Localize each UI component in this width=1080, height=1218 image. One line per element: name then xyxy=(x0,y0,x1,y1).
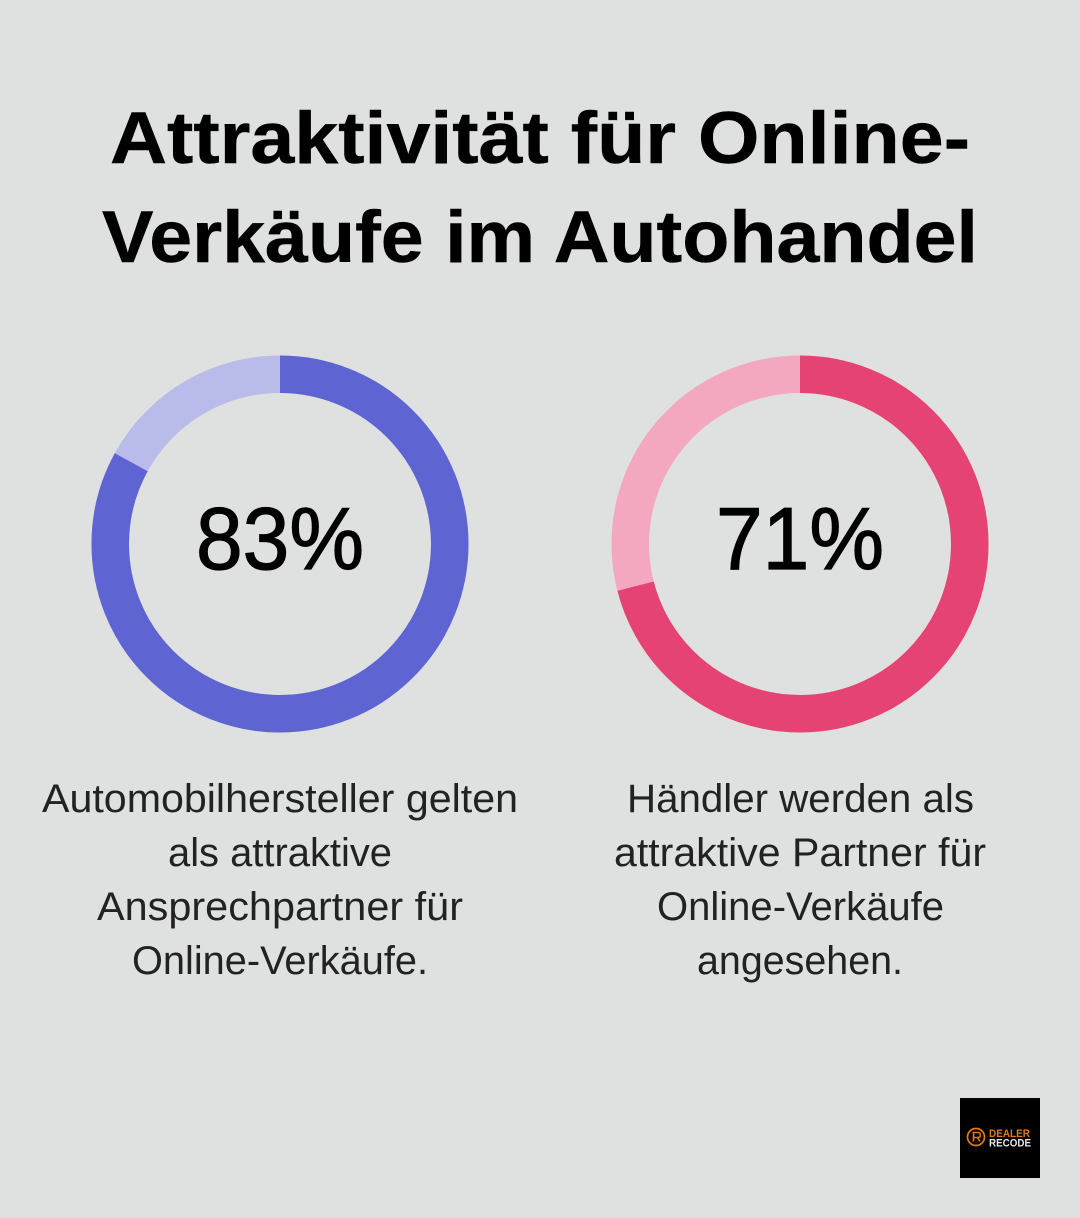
title: Verkäufe im Autohandel xyxy=(102,197,978,278)
description: dealers: Online-Verkäufe xyxy=(657,885,944,929)
description: manufacturers: Automobilhersteller gelten xyxy=(42,777,518,821)
description: dealers: attraktive Partner für xyxy=(614,831,986,875)
logo: Dealer Recode xyxy=(960,1098,1040,1178)
donut chart: 71% xyxy=(630,374,970,714)
description: dealers: Händler werden als xyxy=(627,777,974,821)
title xyxy=(102,98,978,278)
title: Attraktivität für Online- xyxy=(110,98,970,179)
logo wordmark: DEALER xyxy=(989,1128,1030,1140)
donut chart: 83% xyxy=(110,374,450,714)
icon: R in circle xyxy=(968,1128,984,1146)
panel: dealers 71% xyxy=(614,374,986,983)
description: manufacturers: Ansprechpartner für xyxy=(97,885,463,929)
value: 71%: 71% xyxy=(716,489,884,588)
logo wordmark: RECODE xyxy=(989,1138,1031,1150)
description: manufacturers: Online-Verkäufe. xyxy=(132,939,428,983)
value: 83%: 83% xyxy=(196,489,364,588)
description: dealers xyxy=(614,777,986,983)
description: manufacturers xyxy=(42,777,518,983)
description: manufacturers: als attraktive xyxy=(168,831,392,875)
panel: manufacturers 83% xyxy=(42,374,518,983)
logo wordmark xyxy=(989,1128,1031,1150)
description: dealers: angesehen. xyxy=(697,939,903,983)
